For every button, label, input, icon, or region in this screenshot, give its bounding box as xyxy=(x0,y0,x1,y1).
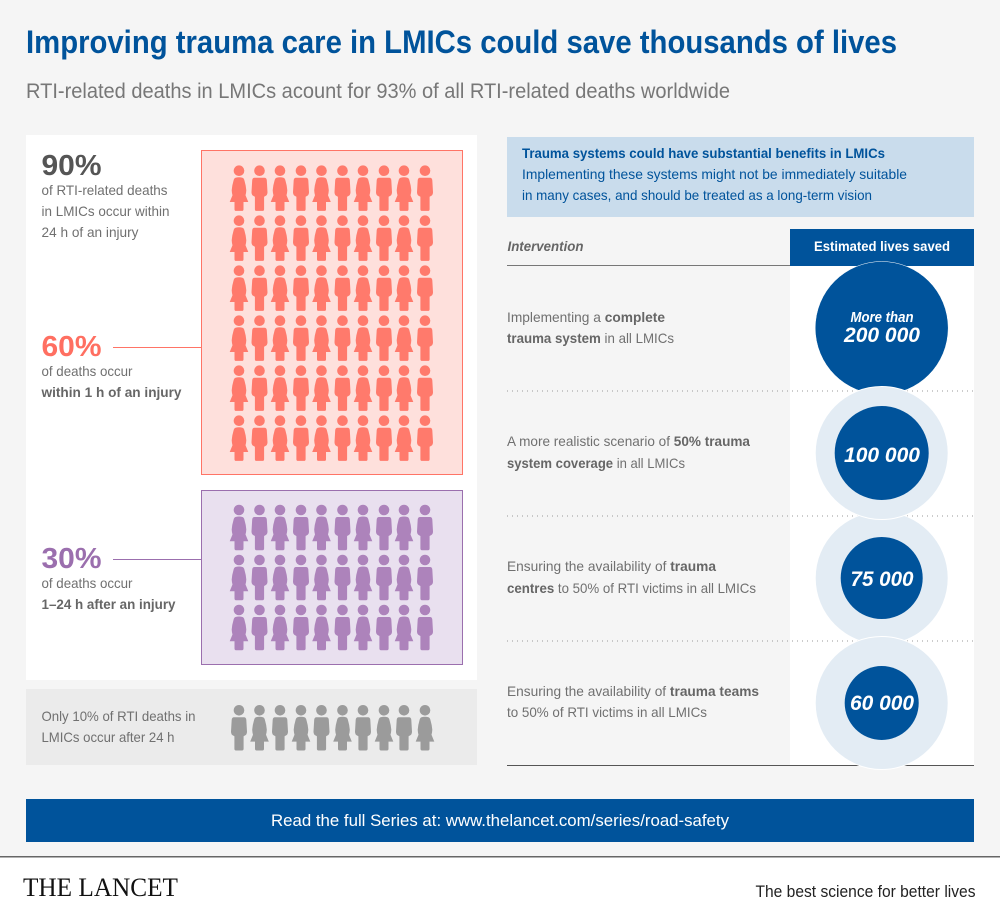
circle: 75 000 xyxy=(815,511,949,645)
statistic: 90% within 24 h xyxy=(42,150,170,240)
panel: deaths after 24 h xyxy=(26,689,477,765)
statistic: 60% within 1 h: of deaths occur xyxy=(42,363,133,379)
lives saved column background xyxy=(790,266,974,765)
row 3 text: Ensuring the availability of trauma xyxy=(507,558,716,574)
statistic: 90% within 24 h: 24 h of an injury xyxy=(42,224,138,240)
statistic: 90% within 24 h: 90% xyxy=(42,150,102,182)
statistic: 60% within 1 h xyxy=(41,331,201,400)
pictogram: 30% deaths 1–24 h xyxy=(202,490,462,664)
pictogram: 60% deaths within 1 h xyxy=(202,150,462,474)
column heading: estimated lives saved xyxy=(790,229,974,266)
subtitle: RTI-related deaths in LMICs acount for 93% of all RTI-related deaths worldwide xyxy=(26,80,730,103)
panel: deaths after 24 h: Only 10% of RTI deaths in xyxy=(42,708,196,724)
banner: read the full series xyxy=(26,799,974,842)
statistic: 30% 1–24 h: 30% xyxy=(42,543,102,575)
panel: timing of deaths xyxy=(26,135,477,680)
circle: 60 000 xyxy=(815,636,949,770)
row 4 text: to 50% of RTI victims in all LMICs xyxy=(507,704,707,720)
pictogram: 10% deaths after 24 h xyxy=(231,705,434,750)
row 1 text: trauma system in all LMICs xyxy=(507,330,674,346)
row 4 text xyxy=(507,683,759,720)
banner: read the full series: Read the full Series at: www.thelancet.com/series/road-safety xyxy=(271,811,729,830)
circle: 75 000: 75 000 xyxy=(850,568,914,591)
row 3 text: centres to 50% of RTI victims in all LMICs xyxy=(507,580,756,596)
logo: The Lancet: THE LANCET xyxy=(23,873,178,902)
row 1 text: Implementing a complete xyxy=(507,309,665,325)
row 2 text: system coverage in all LMICs xyxy=(507,455,685,471)
statistic: 30% 1–24 h: of deaths occur xyxy=(42,575,133,591)
statistic: 60% within 1 h: 60% xyxy=(42,331,102,363)
row 4 text: Ensuring the availability of trauma teams xyxy=(507,683,759,699)
callout: trauma systems xyxy=(507,137,974,217)
circle: 100 000: 100 000 xyxy=(844,444,920,467)
title: Improving trauma care in LMICs could save thousands of lives xyxy=(26,24,897,60)
statistic: 30% 1–24 h: 1–24 h after an injury xyxy=(42,596,176,612)
circle: more than 200 000: 200 000 xyxy=(843,324,920,347)
circle: 100 000 xyxy=(815,386,949,520)
statistic: 90% within 24 h: in LMICs occur within xyxy=(42,203,170,219)
circle: more than 200 000: More than xyxy=(850,309,914,326)
row 2 text xyxy=(507,433,750,471)
panel: deaths after 24 h: LMICs occur after 24 h xyxy=(42,729,174,745)
circle: 60 000: 60 000 xyxy=(850,692,914,715)
table: interventions and lives saved xyxy=(507,229,974,770)
footer xyxy=(0,856,1000,918)
column heading: estimated lives saved: Estimated lives saved xyxy=(814,238,950,254)
callout: trauma systems: Implementing these systems might not be immediately suitable xyxy=(522,166,907,182)
statistic: 30% 1–24 h xyxy=(42,543,201,612)
row 3 text xyxy=(507,558,756,596)
row 1 text xyxy=(507,309,674,346)
tagline: The best science for better lives xyxy=(756,883,976,901)
callout: trauma systems: Trauma systems could have substantial benefits in LMICs xyxy=(522,145,885,161)
statistic: 90% within 24 h: of RTI-related deaths xyxy=(42,182,168,198)
statistic: 60% within 1 h: within 1 h of an injury xyxy=(41,384,182,400)
column heading: intervention: Intervention xyxy=(508,238,584,254)
circle: more than 200 000 xyxy=(815,262,948,394)
row 2 text: A more realistic scenario of 50% trauma xyxy=(507,433,750,449)
callout: trauma systems: in many cases, and should be treated as a long-term vision xyxy=(522,187,872,203)
